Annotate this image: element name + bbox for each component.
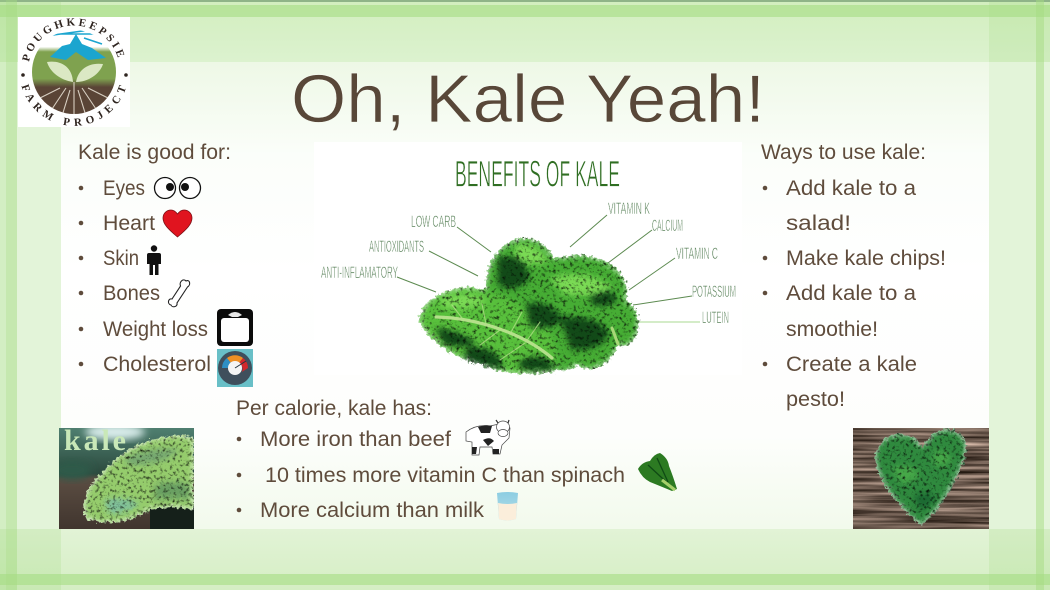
infographic image: benefits of kale: POTASSIUM: [692, 283, 736, 301]
logo: Poughkeepsie Farm Project: FARM PROJECT: [22, 84, 126, 126]
logo artwork: [32, 30, 116, 116]
list item: eyes: Eyes: [103, 177, 145, 200]
list item: eyes: [79, 177, 200, 200]
title: Oh, Kale Yeah!: [291, 61, 765, 137]
infographic image: benefits of kale: BENEFITS OF KALE: [455, 154, 620, 194]
list item: weight loss: [79, 309, 253, 346]
tip: salad: [763, 177, 916, 235]
panel: ways to use kale: [761, 141, 946, 411]
list item: cholesterol: Cholesterol: [103, 353, 211, 376]
tip: pesto: [763, 353, 917, 411]
callout labels: VITAMIN C: [676, 245, 718, 263]
logo ring text: POUGHKEEPSIE: [22, 18, 124, 62]
kale leaf stem: [436, 304, 618, 360]
infographic image: benefits of kale: [314, 142, 742, 375]
tip: salad: salad!: [786, 212, 851, 235]
item: vitamin C with spinach icon: [237, 453, 677, 491]
tip: smoothie: [763, 282, 916, 341]
kale illustration: [418, 238, 639, 374]
callout labels: CALCIUM: [652, 217, 683, 235]
callout labels: [321, 200, 736, 327]
photo caption: kale: kale: [64, 424, 126, 457]
heading: per calorie: Per calorie, kale has:: [236, 397, 432, 420]
list item: bones: Bones: [103, 282, 160, 305]
tip: pesto: Create a kale: [786, 353, 917, 376]
list item: weight loss: Weight loss: [103, 318, 208, 341]
item: vitamin C with spinach icon: 10 times more vitamin C than spinach: [265, 464, 625, 487]
list item: skin: Skin: [103, 247, 139, 270]
item: iron with cow icon: More iron than beef: [260, 428, 451, 451]
photo: kale heart on wood: [853, 428, 989, 529]
panel: kale is good for: [78, 141, 253, 387]
callout labels: LUTEIN: [702, 309, 729, 327]
callout labels: LOW CARB: [411, 213, 456, 231]
photo: kale on a table: [52, 424, 194, 529]
panel: per calorie comparisons: [236, 397, 677, 522]
item: calcium with milk icon: [237, 492, 518, 522]
tip: smoothie: Add kale to a: [786, 282, 916, 305]
tip: pesto: pesto!: [786, 388, 845, 411]
tip: chips: Make kale chips!: [786, 247, 946, 270]
list item: heart: [79, 210, 192, 237]
list item: skin: [79, 245, 161, 275]
item: calcium with milk icon: More calcium than milk: [260, 499, 485, 522]
item: iron with cow icon: [237, 420, 510, 455]
tip: smoothie: smoothie!: [786, 318, 878, 341]
central content panel: [61, 62, 989, 529]
callout labels: VITAMIN K: [608, 200, 650, 218]
heading: kale is good for: Kale is good for:: [78, 141, 231, 164]
logo: Poughkeepsie Farm Project: [18, 17, 130, 127]
tip: salad: Add kale to a: [786, 177, 916, 200]
list item: bones: [79, 280, 190, 307]
list item: cholesterol: [79, 349, 253, 387]
list item: heart: Heart: [103, 212, 155, 235]
callout labels: ANTIOXIDANTS: [369, 238, 424, 256]
callout labels: ANTI-INFLAMATORY: [321, 264, 398, 282]
heading: ways to use kale: Ways to use kale:: [761, 141, 926, 164]
